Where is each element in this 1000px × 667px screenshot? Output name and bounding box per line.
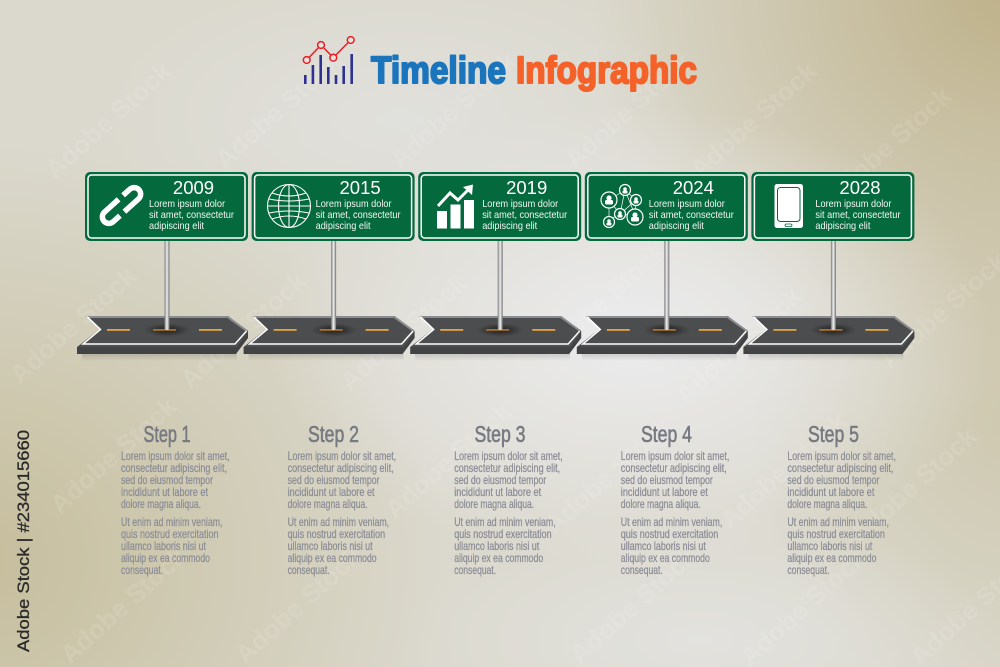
text block: step 2: [288, 421, 396, 577]
panel: sign 2009: adipiscing elit: [149, 220, 204, 232]
text block: step 1: Lorem ipsum dolor sit amet,: [121, 449, 230, 463]
text block: step 4: incididunt ut labore et: [621, 485, 708, 499]
text block: step 1: Ut enim ad minim veniam,: [121, 515, 222, 529]
panel: sign 2015: adipiscing elit: [316, 220, 371, 232]
text block: step 5: Ut enim ad minim veniam,: [787, 515, 889, 529]
watermarks: Adobe Stock: [534, 235, 673, 364]
text block: step 2: sed do eiusmod tempor: [288, 473, 380, 487]
icon: growth chart: [437, 184, 474, 228]
watermarks: Adobe Stock: [539, 410, 678, 539]
panel: sign 2015: sit amet, consectetur: [316, 209, 401, 221]
panel: sign 2019: adipiscing elit: [482, 220, 537, 232]
text block: step 3: ullamco laboris nisi ut: [454, 539, 540, 553]
text block: step 4: aliquip ex ea commodo: [621, 551, 710, 565]
text block: step 5: quis nostrud exercitation: [787, 527, 885, 541]
panel: sign 2019: [418, 172, 581, 241]
panel: sign 2024: [585, 172, 748, 241]
text block: step 5: ullamco laboris nisi ut: [787, 539, 873, 553]
panel: sign 2009: 2009: [173, 177, 214, 198]
icon: chart logo: [303, 37, 354, 84]
text block: step 2: aliquip ex ea commodo: [288, 551, 377, 565]
text block: step 4: consectetur adipiscing elit,: [621, 461, 727, 475]
panel: sign 2028: 2028: [839, 177, 881, 198]
pole 3: [498, 240, 503, 330]
text block: step 3: Step 3: [474, 421, 526, 447]
text block: step 3: consectetur adipiscing elit,: [454, 461, 560, 475]
watermarks: Adobe Stock: [384, 45, 523, 174]
text block: step 5: Lorem ipsum dolor sit amet,: [787, 449, 896, 463]
watermarks: Adobe Stock: [819, 80, 958, 209]
text block: step 1: aliquip ex ea commodo: [121, 551, 210, 565]
watermarks: Adobe Stock: [4, 260, 143, 389]
text block: step 5: consequat.: [787, 563, 829, 577]
panel: sign 2015: Lorem ipsum dolor: [316, 198, 392, 210]
watermarks: Adobe Stock: [714, 405, 853, 534]
text block: step 1: [121, 421, 230, 577]
text block: step 3: Lorem ipsum dolor sit amet,: [454, 449, 563, 463]
text block: step 2: Ut enim ad minim veniam,: [288, 515, 389, 529]
panel: sign 2024: 2024: [673, 177, 714, 198]
text block: step 1: consectetur adipiscing elit,: [121, 461, 227, 475]
text block: step 2: consectetur adipiscing elit,: [288, 461, 394, 475]
text block: step 2: quis nostrud exercitation: [288, 527, 385, 541]
panel: sign 2009: [85, 172, 248, 241]
text block: step 3: quis nostrud exercitation: [454, 527, 552, 541]
text block: step 2: consequat.: [288, 563, 330, 577]
text block: step 3: aliquip ex ea commodo: [454, 551, 543, 565]
watermarks: Adobe Stock: [174, 265, 313, 394]
text block: step 3: incididunt ut labore et: [454, 485, 542, 499]
watermarks: Adobe Stock: [669, 280, 808, 409]
text block: step 1: sed do eiusmod tempor: [121, 473, 213, 487]
text block: step 5: aliquip ex ea commodo: [787, 551, 877, 565]
road 1: [77, 316, 248, 361]
panel: sign 2024: adipiscing elit: [649, 220, 704, 232]
text block: step 3: sed do eiusmod tempor: [454, 473, 546, 487]
panel: sign 2028: [751, 172, 914, 241]
watermarks: Adobe Stock: [684, 55, 823, 184]
text block: step 4: dolore magna aliqua.: [621, 497, 701, 511]
text block: step 4: [621, 421, 729, 577]
watermarks: Adobe Stock: [229, 540, 368, 667]
pole 4: [664, 240, 669, 330]
title: Infographic: [516, 50, 697, 92]
text block: step 5: Step 5: [808, 421, 859, 447]
text block: step 2: dolore magna aliqua.: [288, 497, 368, 511]
road 3: [410, 316, 581, 361]
watermarks: Adobe Stock: [44, 390, 183, 519]
panel: sign 2019: sit amet, consectetur: [482, 209, 568, 221]
watermarks: Adobe Stock: [844, 420, 983, 549]
watermarks: Adobe Stock: [39, 55, 178, 184]
watermarks: Adobe Stock: [564, 540, 703, 667]
text block: step 3: dolore magna aliqua.: [454, 497, 534, 511]
text block: step 2: Lorem ipsum dolor sit amet,: [288, 449, 396, 463]
text block: step 1: ullamco laboris nisi ut: [121, 539, 206, 553]
panel: sign 2024: Lorem ipsum dolor: [649, 198, 725, 210]
text block: step 4: consequat.: [621, 563, 663, 577]
icon: chain link: [100, 185, 143, 226]
watermarks: Adobe Stock: [54, 540, 193, 667]
text block: step 4: ullamco laboris nisi ut: [621, 539, 706, 553]
text block: step 5: dolore magna aliqua.: [787, 497, 867, 511]
pole 2: [331, 240, 336, 330]
stock id text: Adobe Stock | #234015660: [15, 430, 33, 652]
text block: step 4: Step 4: [641, 421, 692, 447]
text block: step 4: sed do eiusmod tempor: [621, 473, 713, 487]
text block: step 4: Lorem ipsum dolor sit amet,: [621, 449, 729, 463]
text block: step 5: incididunt ut labore et: [787, 485, 875, 499]
text block: step 3: [454, 421, 563, 577]
text block: step 3: consequat.: [454, 563, 496, 577]
text block: step 5: sed do eiusmod tempor: [787, 473, 879, 487]
panel: sign 2015: 2015: [340, 177, 381, 198]
title: [371, 50, 697, 92]
panel: sign 2019: 2019: [506, 177, 547, 198]
panel: sign 2019: Lorem ipsum dolor: [482, 198, 559, 210]
text block: step 1: incididunt ut labore et: [121, 485, 209, 499]
road 4: [577, 316, 748, 361]
watermarks: Adobe Stock: [209, 45, 348, 174]
title: Timeline: [371, 50, 506, 92]
panel: sign 2009: Lorem ipsum dolor: [149, 198, 225, 210]
text block: step 4: quis nostrud exercitation: [621, 527, 718, 541]
panel: sign 2009: sit amet, consectetur: [149, 209, 234, 221]
text block: step 2: incididunt ut labore et: [288, 485, 375, 499]
pole 1: [164, 240, 170, 330]
icon: smartphone: [774, 184, 803, 228]
text block: step 2: Step 2: [308, 421, 359, 447]
text block: step 3: Ut enim ad minim veniam,: [454, 515, 556, 529]
text block: step 5: consectetur adipiscing elit,: [787, 461, 893, 475]
panel: sign 2028: sit amet, consectetur: [815, 209, 901, 221]
road 5: [743, 316, 914, 361]
pole 5: [831, 240, 836, 330]
panel: sign 2015: [252, 172, 415, 241]
watermarks: Adobe Stock: [379, 395, 518, 524]
panel: sign 2028: Lorem ipsum dolor: [815, 198, 892, 210]
watermarks: Adobe Stock: [559, 45, 698, 174]
text block: step 1: consequat.: [121, 563, 163, 577]
icon: people network: [601, 184, 643, 228]
text block: step 2: ullamco laboris nisi ut: [288, 539, 373, 553]
text block: step 5: [787, 421, 896, 577]
road 2: [244, 316, 415, 361]
panel: sign 2024: sit amet, consectetur: [649, 209, 734, 221]
text block: step 1: dolore magna aliqua.: [121, 497, 201, 511]
watermarks: Adobe Stock: [334, 267, 473, 396]
text block: step 1: Step 1: [144, 421, 190, 447]
icon: globe: [268, 184, 310, 228]
panel: sign 2028: adipiscing elit: [815, 220, 870, 232]
text block: step 1: quis nostrud exercitation: [121, 527, 218, 541]
text block: step 4: Ut enim ad minim veniam,: [621, 515, 722, 529]
